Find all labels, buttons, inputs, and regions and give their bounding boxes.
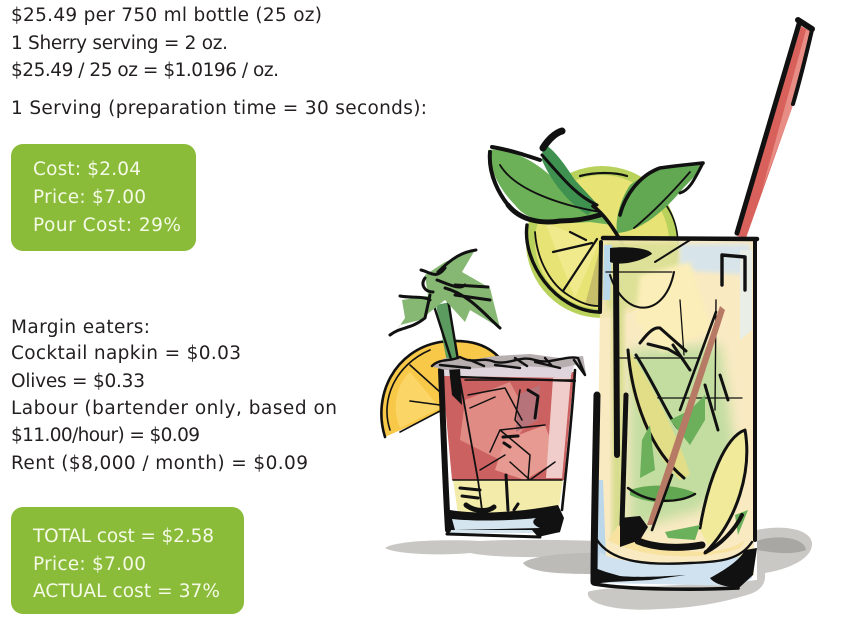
margin eaters text block: [11, 317, 337, 474]
icon: short red cocktail glass with orange and herb: [381, 250, 586, 537]
margin eaters text block: Rent ($8,000 / month) = $0.09: [11, 453, 308, 474]
bottle cost text block: [11, 5, 322, 81]
celery herb: [390, 250, 500, 365]
bottle cost text block: 1 Sherry serving = 2 oz.: [11, 33, 228, 54]
margin eaters text block: Margin eaters:: [11, 317, 150, 338]
callout: pour cost: Pour Cost: 29%: [33, 215, 181, 236]
callout: pour cost: [11, 144, 196, 251]
callout: actual cost: ACTUAL cost = 37%: [33, 581, 220, 602]
glass outline: [592, 238, 757, 589]
lime slice: [526, 166, 678, 318]
glass fill: [442, 366, 574, 533]
long leaf and lime wedges in glass: [628, 350, 748, 553]
glass body: [596, 240, 756, 586]
margin eaters text block: Labour (bartender only, based on: [11, 398, 337, 419]
mint leaves: [488, 131, 703, 247]
icon: drop shadows under glasses: [385, 528, 812, 610]
straw top: [737, 20, 812, 238]
straw inside glass: [647, 306, 725, 530]
bottle cost text block: $25.49 per 750 ml bottle (25 oz): [11, 5, 322, 26]
serving heading: 1 Serving (preparation time = 30 seconds):: [11, 98, 427, 119]
callout: actual cost: TOTAL cost = $2.58: [32, 526, 214, 547]
crushed ice and lines: [606, 240, 745, 430]
icon: tall mojito glass with straw, lime and mint: [488, 20, 812, 589]
orange slice: [381, 341, 503, 437]
glass outline and rim salt: [430, 354, 586, 537]
callout: pour cost: Price: $7.00: [33, 187, 146, 208]
callout: pour cost: Cost: $2.04: [33, 159, 141, 180]
margin eaters text block: Cocktail napkin = $0.03: [11, 343, 241, 364]
callout: actual cost: [11, 507, 244, 614]
ice lines: [453, 380, 575, 480]
callout: actual cost: Price: $7.00: [33, 554, 146, 575]
margin eaters text block: $11.00/hour) = $0.09: [11, 425, 200, 446]
bottle cost text block: $25.49 / 25 oz = $1.0196 / oz.: [11, 60, 279, 81]
margin eaters text block: Olives = $0.33: [11, 371, 145, 392]
